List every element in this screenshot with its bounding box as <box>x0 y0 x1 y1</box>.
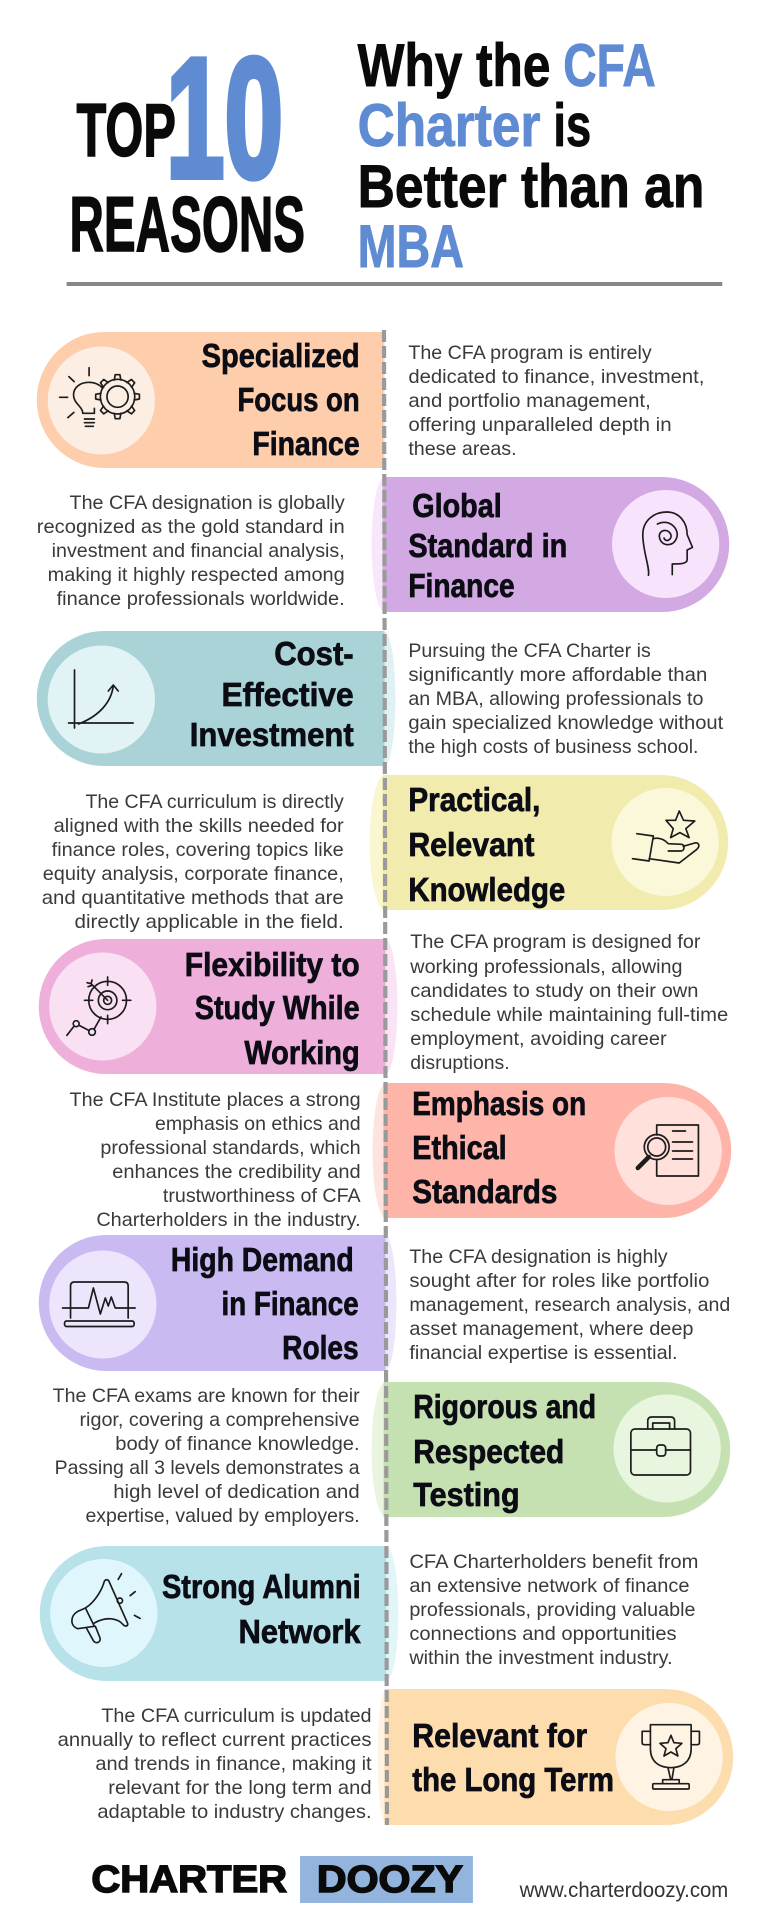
panel: high demand in finance roles <box>39 1235 730 1371</box>
description: these areas. <box>408 439 517 460</box>
pill tint <box>370 776 399 910</box>
description: sought after for roles like portfolio <box>409 1271 709 1292</box>
icon: target with arrow <box>67 977 131 1035</box>
description <box>70 1090 361 1231</box>
icon circle <box>611 788 719 896</box>
description: The CFA program is entirely <box>408 343 652 364</box>
description: aligned with the skills needed for <box>54 816 344 837</box>
icon: hand with star <box>633 811 699 863</box>
pill shape <box>37 631 384 766</box>
heading <box>190 635 354 753</box>
description: management, research analysis, and <box>409 1295 730 1316</box>
icon circle <box>48 346 155 454</box>
footer logo: charter doozy: CHARTER <box>91 1859 287 1901</box>
footer logo: charter doozy: DOOZY <box>317 1859 463 1901</box>
icon circle <box>614 1097 722 1205</box>
title: why the CFA charter is better than an MBA: MBA <box>358 213 464 280</box>
title: why the CFA charter is better than an MBA: Better than an <box>358 153 704 220</box>
heading: Network <box>238 1613 361 1650</box>
heading <box>412 1717 614 1798</box>
description: high level of dedication and <box>113 1482 360 1503</box>
description: Pursuing the CFA Charter is <box>408 641 651 662</box>
description: The CFA curriculum is directly <box>85 792 344 813</box>
description: The CFA designation is globally <box>70 493 345 514</box>
description: and portfolio management, <box>408 391 651 412</box>
heading: Study While <box>195 989 360 1026</box>
pill tint <box>373 1084 398 1218</box>
heading: Respected <box>413 1433 564 1470</box>
heading: Standard in <box>408 527 567 564</box>
heading <box>185 946 360 1071</box>
description: gain specialized knowledge without <box>408 713 724 734</box>
heading: Finance <box>408 567 515 604</box>
description: directly applicable in the field. <box>75 912 344 933</box>
heading <box>413 1388 596 1513</box>
pill shape <box>383 1083 731 1218</box>
panel: flexibility to study while working <box>39 932 728 1074</box>
heading: High Demand <box>171 1241 354 1278</box>
heading: Relevant <box>408 826 535 863</box>
pill shape <box>384 1689 733 1825</box>
panel: global standard in finance <box>37 477 729 612</box>
icon circle <box>615 1703 723 1811</box>
heading: Standards <box>412 1173 557 1210</box>
icon circle <box>49 1250 156 1358</box>
description: dedicated to finance, investment, <box>408 367 704 388</box>
heading <box>412 1085 586 1210</box>
description <box>408 641 724 758</box>
heading: the Long Term <box>412 1761 614 1798</box>
description: within the investment industry. <box>408 1648 673 1669</box>
header: top 10 reasons: REASONS <box>70 182 305 268</box>
heading: Focus on <box>237 381 360 418</box>
description: emphasis on ethics and <box>155 1114 361 1135</box>
pill shape <box>37 332 384 468</box>
header rule <box>67 282 722 286</box>
heading: in Finance <box>222 1285 359 1322</box>
panel: specialized focus on finance <box>37 332 704 468</box>
heading: Rigorous and <box>413 1388 596 1425</box>
title: why the CFA charter is better than an MBA: is <box>553 92 591 159</box>
pill tint <box>375 1546 398 1680</box>
heading <box>162 1568 361 1650</box>
description: investment and financial analysis, <box>52 541 345 562</box>
description: The CFA program is designed for <box>410 932 700 953</box>
pill tint <box>374 632 395 766</box>
header: top 10 reasons <box>70 24 305 268</box>
icon: lightbulb and gear <box>60 368 139 426</box>
heading: Specialized <box>202 337 360 374</box>
heading <box>408 487 567 604</box>
description: rigor, covering a comprehensive <box>79 1410 360 1431</box>
description: The CFA designation is highly <box>409 1247 668 1268</box>
icon circle <box>48 646 155 754</box>
footer logo: charter doozy <box>91 1856 473 1903</box>
description <box>53 1386 360 1527</box>
heading <box>202 337 360 462</box>
icon: head with spiral <box>643 512 692 575</box>
description: candidates to study on their own <box>410 981 698 1002</box>
icon: trophy <box>642 1725 699 1789</box>
title: why the CFA charter is better than an MBA: Charter <box>358 92 540 159</box>
heading: Knowledge <box>408 871 565 908</box>
description: finance professionals worldwide. <box>57 589 345 610</box>
description: and trends in finance, making it <box>95 1754 372 1775</box>
icon: briefcase <box>631 1417 690 1475</box>
description: The CFA exams are known for their <box>53 1386 360 1407</box>
heading: Cost- <box>274 635 354 672</box>
center dashed divider <box>384 330 387 1825</box>
description: significantly more affordable than <box>408 665 707 686</box>
description: recognized as the gold standard in <box>37 517 345 538</box>
description <box>408 343 704 460</box>
heading <box>408 781 565 908</box>
pill shape <box>39 1235 385 1371</box>
panel: cost-effective investment <box>37 631 724 766</box>
description: connections and opportunities <box>409 1624 677 1645</box>
title: why the CFA charter is better than an MBA: CFA <box>563 32 656 99</box>
pill shape <box>40 1546 386 1681</box>
description: and quantitative methods that are <box>42 888 344 909</box>
description: professionals, providing valuable <box>409 1600 695 1621</box>
footer website url: www.charterdoozy.com <box>519 1879 728 1902</box>
header: top 10 reasons: 10 <box>166 24 283 214</box>
description <box>409 932 728 1074</box>
panel: relevant for the long term <box>58 1689 733 1825</box>
description: relevant for the long term and <box>108 1778 372 1799</box>
description: expertise, valued by employers. <box>85 1506 360 1527</box>
description: Charterholders in the industry. <box>96 1210 361 1231</box>
pill tint <box>374 940 397 1074</box>
heading: Practical, <box>408 781 540 818</box>
description: making it highly respected among <box>48 565 345 586</box>
description: body of finance knowledge. <box>115 1434 360 1455</box>
description: enhances the credibility and <box>112 1162 361 1183</box>
icon circle <box>50 1559 157 1667</box>
description: the high costs of business school. <box>408 737 698 758</box>
description: CFA Charterholders benefit from <box>409 1552 698 1573</box>
pill shape <box>383 1382 730 1517</box>
description: adaptable to industry changes. <box>97 1802 372 1823</box>
icon circle <box>49 952 156 1060</box>
heading: Strong Alumni <box>162 1568 361 1605</box>
heading: Investment <box>190 716 354 753</box>
description <box>58 1706 372 1823</box>
panel: strong alumni network <box>40 1546 698 1681</box>
pill shape <box>382 775 728 910</box>
icon circle <box>612 490 719 598</box>
heading <box>171 1241 359 1366</box>
icon circle <box>613 1394 721 1502</box>
heading: Flexibility to <box>185 946 360 983</box>
icon: laptop with heartbeat <box>63 1282 135 1326</box>
description: offering unparalleled depth in <box>408 415 672 436</box>
pill tint <box>372 1382 399 1516</box>
title: why the CFA charter is better than an MBA: Why the <box>358 32 550 99</box>
heading: Roles <box>282 1329 359 1366</box>
description: trustworthiness of CFA <box>163 1186 361 1207</box>
pill tint <box>372 478 397 612</box>
description: The CFA Institute places a strong <box>70 1090 361 1111</box>
pill tint <box>378 1689 395 1825</box>
heading: Finance <box>252 425 360 462</box>
panel: rigorous and respected testing <box>53 1382 730 1527</box>
heading: Testing <box>413 1476 520 1513</box>
description: asset management, where deep <box>409 1319 693 1340</box>
description: annually to reflect current practices <box>58 1730 372 1751</box>
description: Passing all 3 levels demonstrates a <box>55 1458 360 1479</box>
heading: Ethical <box>412 1129 507 1166</box>
icon: document with magnifier <box>638 1125 698 1176</box>
description: schedule while maintaining full-time <box>410 1005 728 1026</box>
description: professional standards, which <box>100 1138 361 1159</box>
pill shape <box>382 477 729 612</box>
panel: emphasis on ethical standards <box>70 1083 731 1231</box>
pill shape <box>39 939 385 1074</box>
description: an extensive network of finance <box>409 1576 689 1597</box>
description: an MBA, allowing professionals to <box>408 689 703 710</box>
description: finance roles, covering topics like <box>52 840 344 861</box>
heading: Global <box>412 487 502 524</box>
description: The CFA curriculum is updated <box>101 1706 372 1727</box>
icon: megaphone <box>72 1574 140 1643</box>
title: why the CFA charter is better than an MBA <box>358 32 704 280</box>
description <box>409 1247 730 1364</box>
pill tint <box>375 1236 396 1370</box>
heading: Working <box>244 1034 360 1071</box>
icon: growth chart <box>69 670 133 728</box>
panel: practical, relevant knowledge <box>42 775 728 933</box>
description <box>42 792 344 933</box>
description <box>408 1552 698 1669</box>
heading: Relevant for <box>412 1717 587 1754</box>
description: disruptions. <box>410 1053 510 1074</box>
description: working professionals, allowing <box>409 957 683 978</box>
description: financial expertise is essential. <box>409 1343 678 1364</box>
heading: Effective <box>222 676 354 713</box>
description: employment, avoiding career <box>410 1029 667 1050</box>
heading: Emphasis on <box>412 1085 586 1122</box>
description <box>37 493 345 610</box>
header: top 10 reasons: TOP <box>76 88 176 172</box>
description: equity analysis, corporate finance, <box>43 864 344 885</box>
